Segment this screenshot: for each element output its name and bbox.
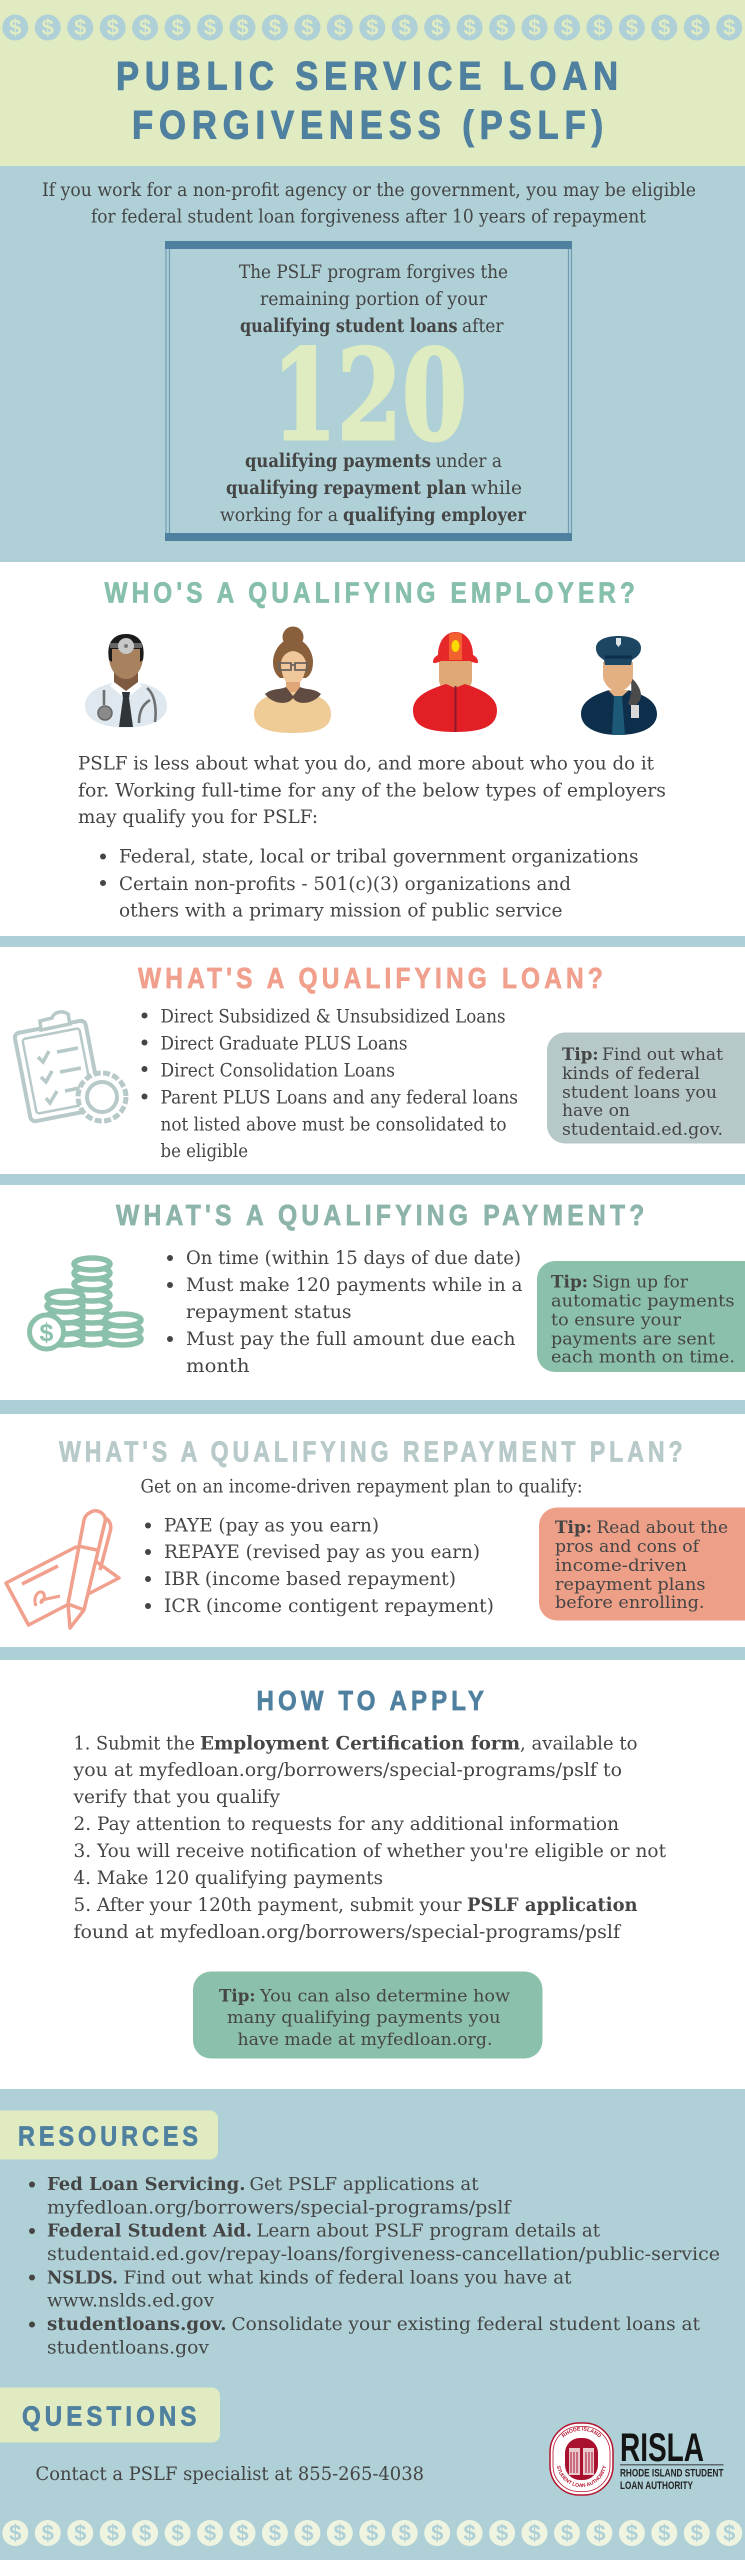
coin row: top: $ xyxy=(204,15,216,40)
employer types list: others with a primary mission of public service xyxy=(119,900,562,922)
coin row: top: $ xyxy=(9,15,21,40)
resources list: Find out what kinds of federal loans you have at xyxy=(124,2268,572,2288)
coin row: bottom: $ xyxy=(42,2520,54,2546)
application steps: found at myfedloan.org/borrowers/special-programs/pslf xyxy=(74,1921,622,1943)
icon: check and pen xyxy=(6,1511,119,1628)
callout: payment tip xyxy=(537,1261,745,1372)
payment requirements list: month xyxy=(186,1355,250,1377)
heading tab: resources: RESOURCES xyxy=(18,2120,202,2152)
callout: loan tip: kinds of federal xyxy=(562,1064,700,1084)
logo wordmark: LOAN AUTHORITY xyxy=(620,2480,693,2492)
callout: application tip: You can also determine how xyxy=(259,1986,510,2006)
coin row: bottom: $ xyxy=(334,2520,346,2546)
framed box: 120 payments: qualifying payments xyxy=(245,450,431,472)
coin row: top: $ xyxy=(431,15,443,40)
logo seal: RHODE ISLAND xyxy=(562,2426,601,2438)
coin row: bottom: $ xyxy=(171,2520,184,2546)
coin row: bottom: $ xyxy=(528,2520,541,2546)
coin row: top: $ xyxy=(74,15,86,40)
loan types list: not listed above must be consolidated to xyxy=(160,1114,506,1136)
coin row: bottom: $ xyxy=(269,2520,281,2546)
employer description: for. Working full-time for any of the below types of employers xyxy=(78,780,666,802)
coin row: top: $ xyxy=(139,15,151,40)
icon: teacher xyxy=(254,626,331,733)
coin row: top: $ xyxy=(236,15,249,40)
callout: payment tip: each month on time. xyxy=(551,1348,735,1368)
logo wordmark: RISLA xyxy=(620,2426,704,2470)
resources list: studentloans.gov xyxy=(47,2338,209,2358)
panel: qualifying repayment plan xyxy=(6,1436,745,1628)
repayment plans list xyxy=(145,1514,494,1617)
framed box: 120 payments: remaining portion of your xyxy=(260,288,488,310)
coin row: bottom: $ xyxy=(236,2520,249,2546)
panel: qualifying loan xyxy=(14,963,745,1162)
callout: repayment tip: pros and cons of xyxy=(555,1537,701,1557)
resources list: NSLDS. xyxy=(47,2268,118,2288)
icon: doctor xyxy=(85,634,167,728)
coin row: bottom: $ xyxy=(691,2520,703,2546)
coin row: top: $ xyxy=(593,15,606,40)
resources list: Get PSLF applications at xyxy=(250,2175,478,2195)
framed box: 120 payments: The PSLF program forgives the xyxy=(239,261,508,283)
coin row: top: $ xyxy=(269,15,281,40)
heading tab: questions xyxy=(0,2388,220,2442)
coin row: bottom: $ xyxy=(496,2520,508,2546)
employer types list: Certain non-profits - 501(c)(3) organizations and xyxy=(119,873,571,895)
coin row: top: $ xyxy=(626,15,638,40)
coin row: bottom: $ xyxy=(399,2520,411,2546)
payment requirements list: Must make 120 payments while in a xyxy=(186,1274,522,1296)
framed box: 120 payments: while xyxy=(471,477,522,499)
heading: how to apply: HOW TO APPLY xyxy=(256,1685,488,1716)
application steps xyxy=(73,1732,666,1943)
logo seal: STUDENT LOAN AUTHORITY xyxy=(557,2465,606,2487)
title: PUBLIC SERVICE LOAN xyxy=(116,54,624,98)
coin row: top: $ xyxy=(42,15,54,40)
big number 120: 120 xyxy=(272,323,467,469)
icon: firefighter xyxy=(413,632,497,732)
callout: application tip xyxy=(193,1972,542,2058)
application steps: you at myfedloan.org/borrowers/special-programs/pslf to xyxy=(73,1759,622,1781)
coin row: bottom: $ xyxy=(463,2520,476,2546)
framed box: 120 payments: qualifying employer xyxy=(343,504,527,526)
callout: application tip: many qualifying payments you xyxy=(227,2008,501,2028)
intro text xyxy=(42,179,696,228)
callout: loan tip: Find out what xyxy=(602,1045,723,1065)
icon: clipboard and gear xyxy=(14,1012,126,1122)
employer description: PSLF is less about what you do, and more about who you do it xyxy=(78,752,654,774)
coin row: bottom: $ xyxy=(658,2520,670,2546)
payment requirements list xyxy=(167,1247,522,1377)
application steps: verify that you qualify xyxy=(73,1786,280,1808)
icon: police officer xyxy=(581,636,657,735)
coin row: top: $ xyxy=(528,15,541,40)
coin row: bottom: $ xyxy=(9,2520,21,2546)
framed box: 120 payments: qualifying student loans xyxy=(240,315,458,337)
resources list: Consolidate your existing federal student loans at xyxy=(232,2315,700,2335)
coin row: top: $ xyxy=(723,15,735,40)
application steps: 4. Make 120 qualifying payments xyxy=(74,1867,383,1889)
resources list: studentloans.gov. xyxy=(47,2315,227,2335)
payment requirements list: On time (within 15 days of due date) xyxy=(186,1247,521,1269)
coin row: bottom: $ xyxy=(431,2520,443,2546)
heading: qualifying employer: WHO'S A QUALIFYING EMPLOYER? xyxy=(104,578,639,610)
heading tab: resources xyxy=(0,2110,218,2160)
icon: coin stacks: $ xyxy=(40,1319,54,1347)
coin row: bottom: $ xyxy=(723,2520,735,2546)
coin row: top: $ xyxy=(496,15,508,40)
resources list: Learn about PSLF program details at xyxy=(256,2222,600,2242)
logo: RISLA xyxy=(549,2422,724,2496)
repayment plans list: REPAYE (revised pay as you earn) xyxy=(164,1541,480,1563)
callout: repayment tip: before enrolling. xyxy=(555,1593,704,1613)
employer types list: Federal, state, local or tribal government organizations xyxy=(119,846,638,868)
loan types list: Parent PLUS Loans and any federal loans xyxy=(160,1086,518,1108)
coin row: bottom: $ xyxy=(204,2520,216,2546)
coin row: bottom: $ xyxy=(561,2520,573,2546)
callout: payment tip: to ensure your xyxy=(551,1310,682,1330)
application steps: 2. Pay attention to requests for any additional information xyxy=(74,1813,619,1835)
header panel xyxy=(0,0,745,166)
application steps: 1. Submit the xyxy=(74,1732,195,1754)
callout: repayment tip: income-driven xyxy=(555,1556,687,1576)
callout: loan tip xyxy=(547,1032,745,1144)
intro text: for federal student loan forgiveness after 10 years of repayment xyxy=(91,206,646,228)
loan types list: Direct Graduate PLUS Loans xyxy=(160,1032,408,1054)
coin row: top: $ xyxy=(463,15,476,40)
employer types list xyxy=(100,846,638,922)
callout: payment tip: payments are sent xyxy=(551,1330,715,1350)
application steps: 3. You will receive notification of whether you're eligible or not xyxy=(74,1840,666,1862)
callout: repayment tip: repayment plans xyxy=(555,1575,706,1595)
coin row: bottom xyxy=(2,2520,742,2546)
payment requirements list: Must pay the full amount due each xyxy=(186,1328,516,1350)
coin row: bottom: $ xyxy=(74,2520,86,2546)
resources list: Federal Student Aid. xyxy=(47,2222,252,2242)
callout: loan tip: Tip: xyxy=(562,1045,598,1065)
coin row: bottom: $ xyxy=(139,2520,151,2546)
repayment plans list: ICR (income contigent repayment) xyxy=(164,1595,494,1617)
coin row: top: $ xyxy=(658,15,670,40)
title xyxy=(116,54,624,148)
loan types list: be eligible xyxy=(160,1140,248,1162)
callout: loan tip: student loans you xyxy=(562,1083,717,1103)
repayment plan intro: Get on an income-driven repayment plan to qualify: xyxy=(140,1476,582,1498)
coin row: bottom: $ xyxy=(366,2520,378,2546)
coin row: bottom: $ xyxy=(626,2520,638,2546)
coin row: top: $ xyxy=(366,15,378,40)
resources list xyxy=(29,2175,720,2358)
framed box: 120 payments: under a xyxy=(436,450,502,472)
logo seal xyxy=(549,2422,614,2496)
coin row: top: $ xyxy=(691,15,703,40)
framed box: 120 payments: qualifying repayment plan xyxy=(226,477,467,499)
repayment plans list: PAYE (pay as you earn) xyxy=(164,1514,379,1536)
callout: loan tip: studentaid.ed.gov. xyxy=(562,1120,723,1140)
callout: repayment tip xyxy=(539,1508,745,1620)
heading tab: questions: QUESTIONS xyxy=(22,2400,200,2432)
resources list: myfedloan.org/borrowers/special-programs/pslf xyxy=(47,2198,512,2218)
callout: application tip: Tip: xyxy=(219,1986,256,2006)
panel: intro and 120 payments xyxy=(0,166,745,562)
contact text: Contact a PSLF specialist at 855-265-4038 xyxy=(36,2463,424,2485)
intro text: If you work for a non-profit agency or the government, you may be eligible xyxy=(42,179,696,201)
coin row: top: $ xyxy=(107,15,119,40)
coin row: top: $ xyxy=(171,15,184,40)
application steps: , available to xyxy=(520,1732,638,1754)
coin row: bottom: $ xyxy=(593,2520,606,2546)
application steps: PSLF application xyxy=(467,1894,638,1916)
coin row: top: $ xyxy=(334,15,346,40)
panel: how to apply xyxy=(73,1685,666,2058)
application steps: Employment Certification form xyxy=(200,1732,520,1754)
panel: qualifying employer xyxy=(78,578,666,922)
icon: coin stacks xyxy=(30,1258,141,1349)
callout: repayment tip: Tip: xyxy=(555,1518,592,1538)
resources list: www.nslds.ed.gov xyxy=(47,2292,214,2312)
callout: payment tip: Tip: xyxy=(551,1272,588,1292)
resources list: Fed Loan Servicing. xyxy=(47,2175,246,2195)
employer description xyxy=(78,752,666,828)
callout: repayment tip: Read about the xyxy=(596,1518,728,1538)
heading: qualifying loan: WHAT'S A QUALIFYING LOAN? xyxy=(138,963,607,995)
callout: application tip: have made at myfedloan.org. xyxy=(238,2030,492,2050)
repayment plans list: IBR (income based repayment) xyxy=(164,1568,456,1590)
coin row: top xyxy=(2,14,742,40)
coin row: bottom: $ xyxy=(301,2520,314,2546)
coin row: top: $ xyxy=(561,15,573,40)
heading: qualifying payment: WHAT'S A QUALIFYING PAYMENT? xyxy=(116,1200,648,1232)
application steps: 5. After your 120th payment, submit your xyxy=(74,1894,462,1916)
panel: qualifying payment xyxy=(30,1200,745,1377)
loan types list: Direct Subsidized & Unsubsidized Loans xyxy=(160,1006,506,1028)
coin row: top: $ xyxy=(399,15,411,40)
callout: payment tip: Sign up for xyxy=(592,1272,689,1292)
callout: payment tip: automatic payments xyxy=(551,1292,734,1312)
framed box: 120 payments: working for a xyxy=(220,504,338,526)
loan types list xyxy=(142,1006,518,1162)
panel: resources and questions xyxy=(0,2089,745,2560)
callout: loan tip: have on xyxy=(562,1101,630,1121)
framed box: 120 payments: after xyxy=(462,315,504,337)
resources list: studentaid.ed.gov/repay-loans/forgiveness-cancellation/public-service xyxy=(47,2245,720,2265)
title: FORGIVENESS (PSLF) xyxy=(132,104,609,148)
employer description: may qualify you for PSLF: xyxy=(78,806,318,828)
payment requirements list: repayment status xyxy=(186,1301,352,1323)
coin row: bottom: $ xyxy=(107,2520,119,2546)
framed box: 120 payments xyxy=(165,241,572,541)
loan types list: Direct Consolidation Loans xyxy=(160,1060,395,1082)
coin row: top: $ xyxy=(301,15,314,40)
logo wordmark xyxy=(620,2426,724,2492)
